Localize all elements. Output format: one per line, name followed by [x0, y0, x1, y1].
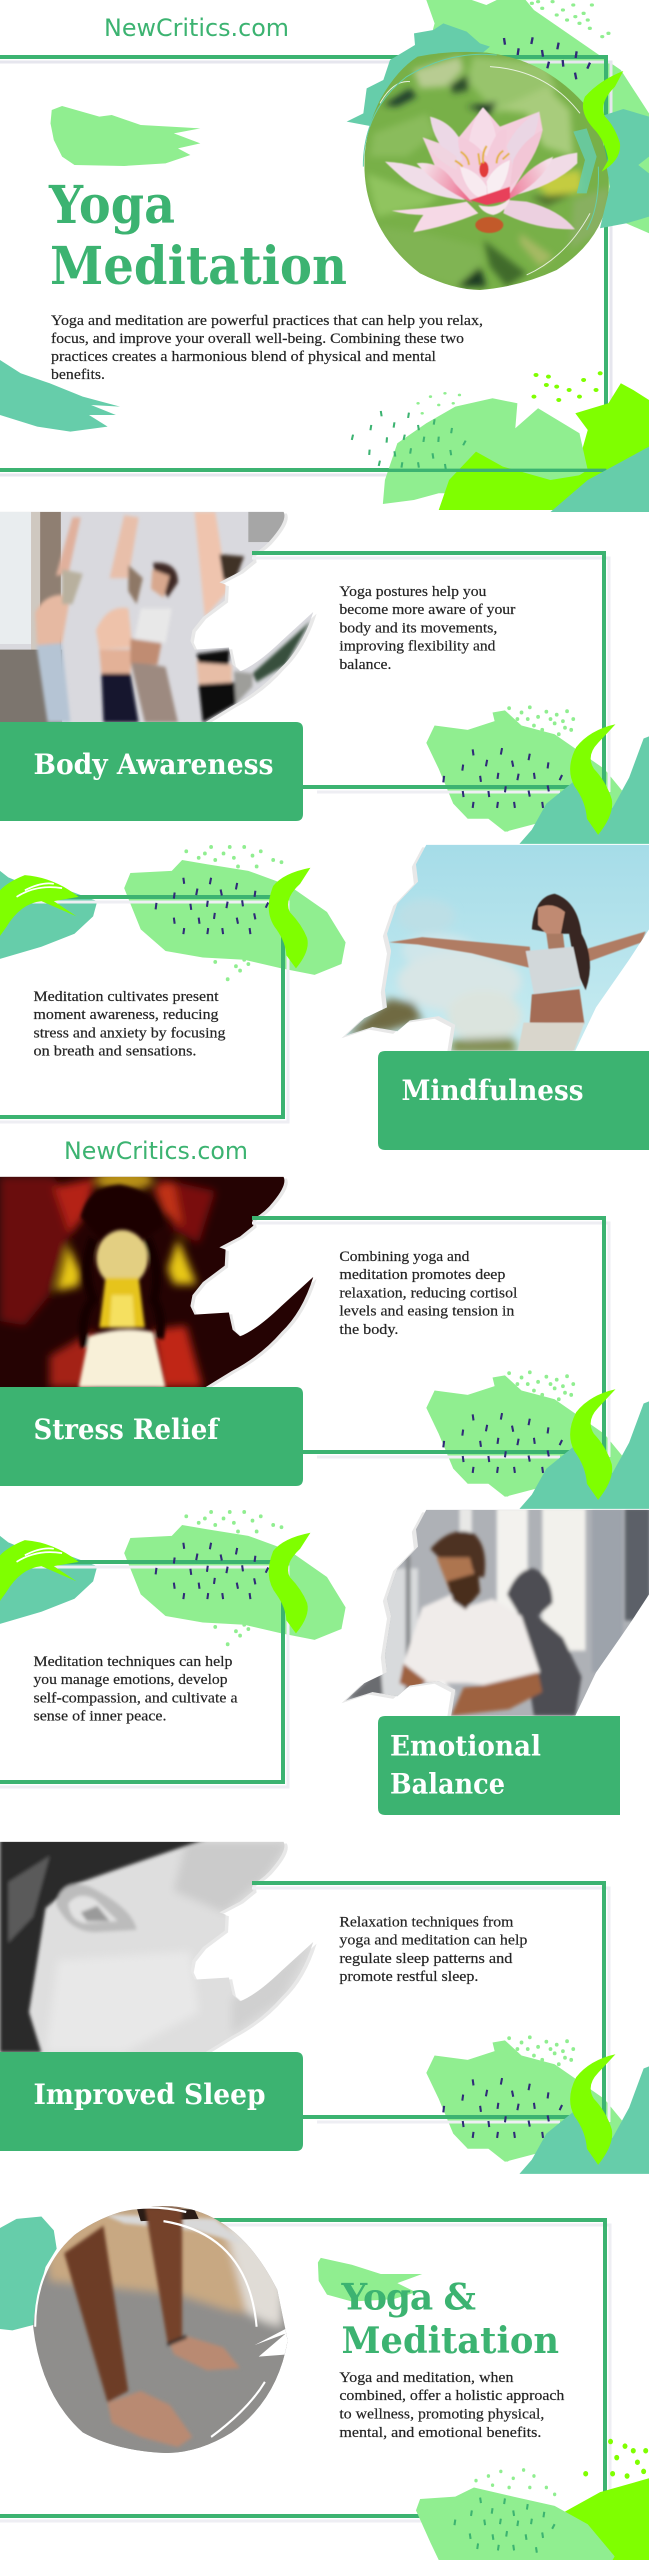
frame [0, 2220, 610, 2521]
hero section [0, 0, 649, 512]
section: stress relief [0, 1169, 649, 1509]
deco dashes [443, 748, 562, 808]
frame [0, 897, 288, 1122]
description [339, 1249, 517, 1338]
decorative brush behind title [50, 106, 200, 166]
section: mindfulness [0, 843, 649, 1165]
description: improving flexibility and [339, 638, 496, 654]
logo text: NewCritics.com [64, 1137, 248, 1165]
description: Meditation techniques can help [34, 1654, 233, 1670]
photo: neck and ear [0, 1839, 323, 2056]
closing title: Yoga & [340, 2276, 476, 2318]
label box [378, 1716, 620, 1815]
intro paragraph: focus, and improve your overall well-being. Combining these two [51, 331, 464, 347]
description: you manage emotions, develop [34, 1672, 228, 1688]
deco blob [426, 1372, 622, 1497]
hero frame [0, 57, 611, 475]
main title: Meditation [50, 236, 347, 297]
description: regulate sleep patterns and [339, 1951, 513, 1967]
description: Relaxation techniques from [339, 1914, 514, 1930]
label box [0, 1387, 303, 1486]
decorative brush behind title [318, 2258, 422, 2301]
section: emotional balance [0, 1508, 649, 1815]
description: Yoga and meditation, when [339, 2370, 514, 2386]
bottom right teal corner [550, 447, 649, 512]
frame [252, 1218, 609, 1457]
main title: Yoga [48, 175, 175, 236]
deco blob [426, 2037, 622, 2162]
description: combined, offer a holistic approach [339, 2388, 565, 2404]
description: become more aware of your [339, 602, 515, 618]
closing title [340, 2276, 559, 2362]
label box [0, 2052, 303, 2151]
right teal brush [583, 71, 649, 228]
deco dashes [156, 878, 268, 934]
lotus petals [385, 107, 577, 233]
deco dashes [443, 1413, 562, 1473]
description: on breath and sensations. [34, 1044, 196, 1060]
label box: Stress Relief [34, 1413, 220, 1446]
description: Meditation cultivates present [34, 989, 219, 1005]
frame [0, 1562, 288, 1787]
intro paragraph: Yoga and meditation are powerful practices that can help you relax, [51, 313, 483, 329]
deco blob [0, 1512, 346, 1644]
label box [378, 1051, 649, 1150]
main title [48, 175, 347, 297]
label box: Mindfulness [402, 1074, 584, 1107]
description [339, 584, 515, 673]
description: moment awareness, reducing [34, 1007, 219, 1023]
intro paragraph: benefits. [51, 367, 105, 383]
deco lime [0, 1533, 310, 1633]
description: Yoga postures help you [339, 584, 487, 600]
description: balance. [339, 657, 391, 673]
label box [0, 722, 303, 821]
intro paragraph: practices creates a harmonious blend of physical and mental [51, 349, 436, 365]
teal brush left [0, 2217, 57, 2330]
top teal brush [347, 23, 490, 127]
label box: Balance [390, 1768, 505, 1800]
photo: yoga class [0, 509, 323, 726]
label box: Improved Sleep [34, 2078, 266, 2111]
lotus photo [362, 52, 609, 290]
logo text: NewCritics.com [104, 14, 289, 42]
deco teal and lime [519, 724, 649, 844]
section: improved sleep [0, 1839, 649, 2174]
white ring strokes [380, 67, 590, 275]
top dashes [504, 37, 590, 79]
white ring strokes [35, 2208, 265, 2437]
description: the body. [339, 1322, 398, 1338]
deco dashes [443, 2078, 562, 2138]
description: body and its movements, [339, 620, 497, 636]
description [339, 1914, 527, 1985]
description: stress and anxiety by focusing [34, 1026, 226, 1042]
description: promote restful sleep. [339, 1969, 478, 1985]
deco teal and lime [519, 1389, 649, 1509]
description: self-compassion, and cultivate a [34, 1690, 238, 1706]
description: Combining yoga and [339, 1249, 470, 1265]
intro paragraph [51, 313, 483, 383]
frame [252, 1883, 609, 2122]
description: relaxation, reducing cortisol [339, 1286, 517, 1302]
photo: man in white shirt [339, 1508, 649, 1720]
photo: glowing woman [0, 1169, 323, 1391]
description [34, 1654, 238, 1724]
description: meditation promotes deep [339, 1267, 505, 1283]
bottom right lime and blob [352, 373, 649, 510]
description [34, 989, 226, 1060]
description: to wellness, promoting physical, [339, 2406, 544, 2422]
description [339, 2370, 565, 2441]
left teal brush [0, 360, 120, 432]
deco dashes [156, 1543, 268, 1599]
description: yoga and meditation can help [339, 1933, 527, 1949]
deco blob [0, 847, 346, 979]
section: yoga and meditation closing [0, 2203, 649, 2560]
bottom right decoration [416, 2442, 649, 2560]
section: body awareness [0, 509, 649, 844]
description: mental, and emotional benefits. [339, 2425, 541, 2441]
deco lime [0, 868, 310, 968]
frame [252, 553, 609, 792]
deco blob [426, 707, 622, 832]
closing title: Meditation [342, 2320, 559, 2362]
label box: Emotional [390, 1730, 541, 1762]
light green top brush [414, 0, 649, 233]
description: levels and easing tension in [339, 1304, 515, 1320]
label box: Body Awareness [34, 748, 274, 781]
description: sense of inner peace. [34, 1708, 166, 1724]
deco teal and lime [519, 2054, 649, 2174]
photo: woman with open arms [339, 843, 649, 1055]
photo: hands on mat [29, 2203, 294, 2460]
